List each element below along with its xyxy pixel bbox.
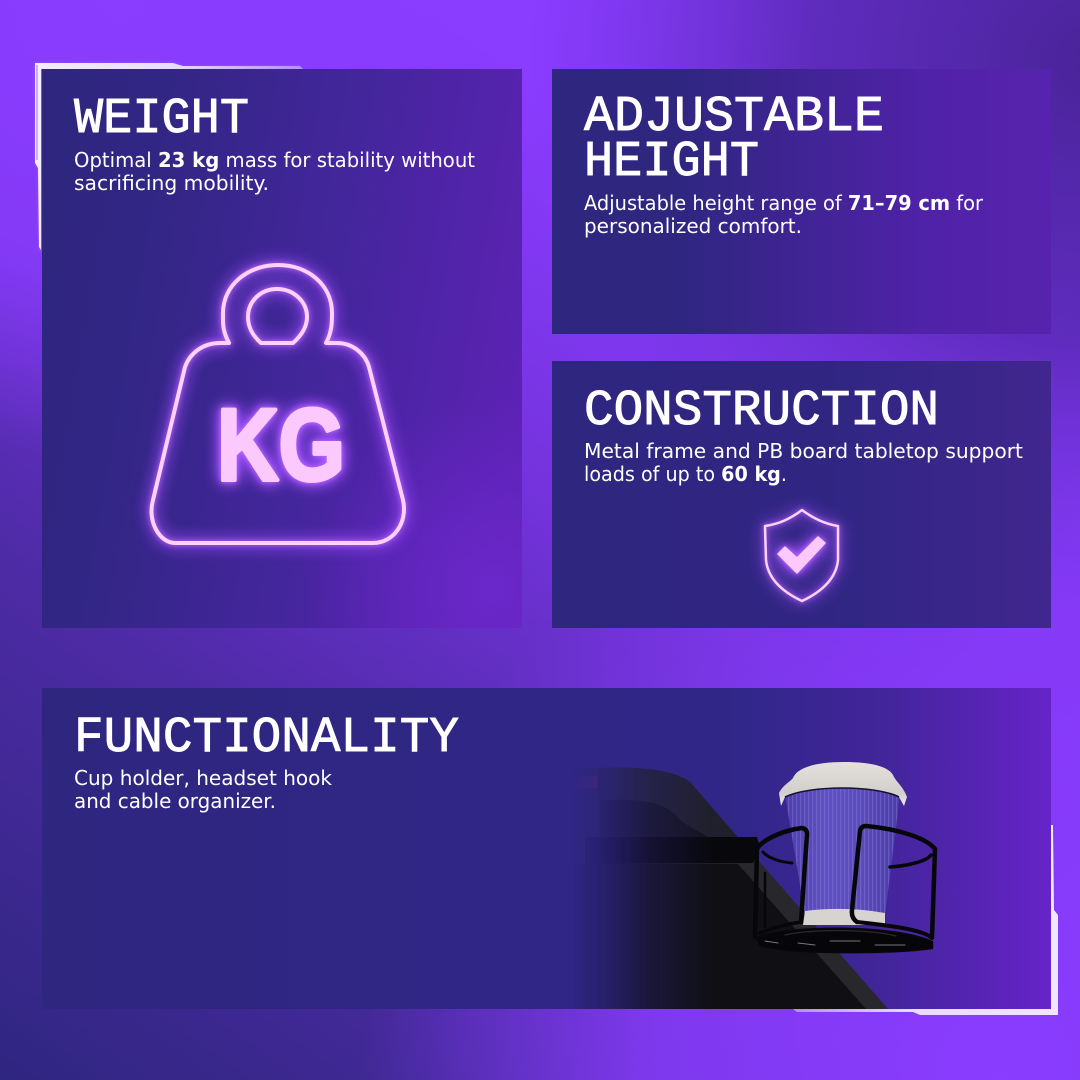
text: weight description: sacrificing mobility.	[74, 171, 269, 195]
heading: construction: CONSTRUCTION	[584, 383, 939, 440]
text: functionality description: Cup holder, headset hook	[74, 766, 332, 790]
heading: adjustable height: HEIGHT	[584, 134, 759, 191]
panel: functionality	[42, 688, 1051, 1009]
photo: black wire cup holder	[755, 826, 935, 952]
icon: neon shield with check	[765, 510, 838, 601]
icon label: KG: KG	[217, 388, 345, 502]
heading: adjustable height	[584, 89, 884, 191]
text: functionality description	[74, 766, 332, 813]
frame accent: bottom right corner	[793, 825, 1058, 1015]
photo: paper coffee cup	[779, 762, 907, 925]
heading: weight: WEIGHT	[74, 91, 249, 148]
text: construction description: loads of up to 60 kg.	[584, 462, 787, 486]
text: adjustable height description	[584, 191, 984, 238]
panel: weight	[42, 69, 522, 628]
panel: adjustable height	[552, 69, 1051, 334]
text: weight description	[74, 148, 475, 195]
photo: desk corner fading into panel	[572, 768, 888, 1009]
heading: functionality: FUNCTIONALITY	[74, 710, 459, 767]
text: adjustable height description: personalized comfort.	[584, 214, 802, 238]
icon: neon kettlebell weight	[152, 265, 404, 543]
text: functionality description: and cable organizer.	[74, 789, 276, 813]
text: construction description: Metal frame and PB board tabletop support	[584, 439, 1023, 463]
text: construction description	[584, 439, 1023, 486]
heading: adjustable height: ADJUSTABLE	[584, 89, 884, 146]
text: adjustable height description: Adjustable height range of 71–79 cm for	[584, 191, 984, 215]
panel: construction	[552, 361, 1051, 628]
frame accent: top left corner	[35, 63, 303, 256]
text: weight description: Optimal 23 kg mass for stability without	[74, 148, 475, 172]
